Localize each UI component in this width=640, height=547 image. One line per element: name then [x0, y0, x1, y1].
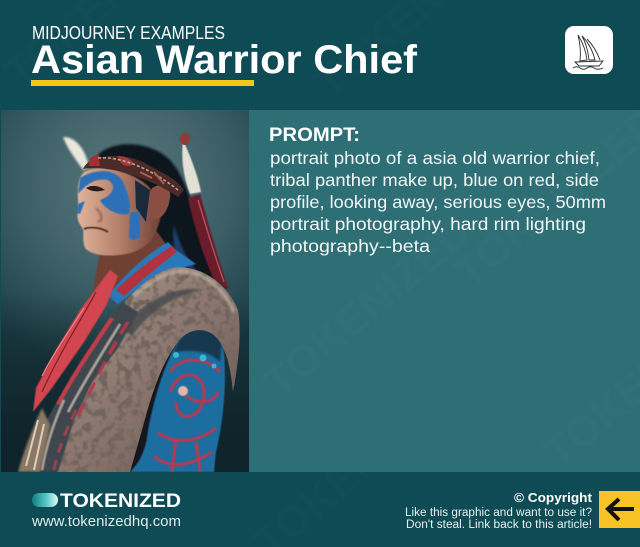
panel watermark: [255, 97, 640, 478]
prompt text: [270, 148, 606, 256]
white feather right: [182, 140, 201, 194]
header: [31, 23, 418, 86]
headband: [83, 156, 184, 197]
arm tattoo: [154, 360, 220, 472]
shawl inner dark fold: [122, 289, 205, 336]
prompt text: portrait photo of a asia old warrior chief,: [270, 148, 600, 168]
copyright block: © Copyright: [514, 490, 593, 505]
prompt text: photography--beta: [270, 236, 430, 256]
ear: [149, 185, 170, 219]
title: Asian Warrior Chief: [31, 38, 418, 82]
mouth: [84, 228, 108, 232]
eye: [86, 186, 105, 191]
panel watermark: TOKENIZED: [255, 207, 481, 408]
prompt text: profile, looking away, serious eyes, 50mm: [270, 192, 606, 212]
white feather left: [63, 137, 89, 170]
panel: prompt: [249, 97, 640, 478]
shawl rim: [134, 271, 234, 312]
shawl mottled texture: [57, 267, 240, 472]
arm: [130, 327, 225, 472]
copyright block: [405, 490, 593, 531]
long hair: [98, 144, 226, 290]
collar: blue and red: [108, 242, 196, 304]
red strand: [188, 194, 229, 290]
eyebrow text: MIDJOURNEY EXAMPLES: [32, 23, 225, 43]
icon: Midjourney boat logo: [565, 26, 613, 74]
footer: [31, 490, 640, 531]
logo wordmark: TOKENIZED: [60, 490, 181, 512]
icon: yellow arrow box: [599, 491, 640, 528]
tassels: [18, 408, 50, 472]
footer logo: [32, 490, 181, 512]
shadow between shawl and arm: [130, 346, 176, 470]
prompt text: portrait photography, hard rim lighting: [270, 214, 586, 234]
hair at temple: [135, 180, 150, 222]
title underline: [31, 80, 254, 86]
woven bands: [34, 302, 138, 472]
prompt text: tribal panther make up, blue on red, side: [270, 170, 599, 190]
portrait photo: warrior chief: [1, 110, 249, 472]
website URL: www.tokenizedhq.com: [31, 513, 181, 530]
face: [77, 168, 162, 256]
logo mark: [32, 493, 58, 507]
neck: [92, 230, 166, 300]
red fringe: [33, 270, 118, 412]
copyright block: Like this graphic and want to use it?: [405, 507, 592, 519]
shawl: fur: [57, 267, 240, 472]
copyright block: Don't steal. Link back to this article!: [406, 519, 592, 531]
photo backdrop: [1, 110, 249, 387]
prompt heading: PROMPT:: [269, 125, 360, 146]
blue face paint: [77, 171, 140, 240]
